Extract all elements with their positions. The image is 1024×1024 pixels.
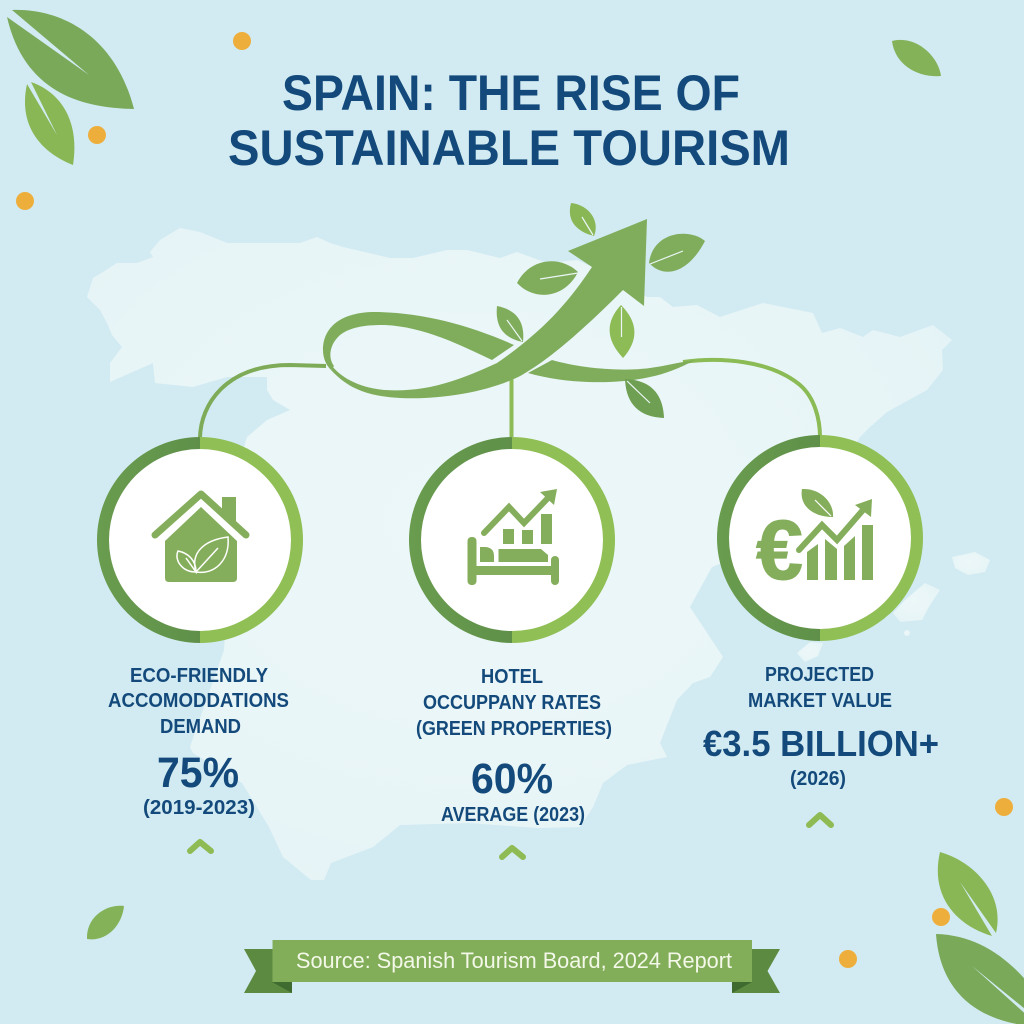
- leaf on arrow 5: [610, 305, 634, 358]
- growth arrow ribbon: [323, 219, 695, 398]
- text block: hotel occupancy: OCCUPPANY RATES: [423, 692, 601, 714]
- text block: projected market value: [703, 664, 939, 790]
- chevrons: [190, 815, 831, 857]
- decorative leaf: bottom-right lower: [936, 934, 1024, 1024]
- panel: market value icon: [717, 435, 923, 641]
- decorative leaf: top-left small: [25, 82, 74, 165]
- text block: eco-friendly demand: (2019-2023): [143, 797, 255, 819]
- text block: hotel occupancy: AVERAGE (2023): [441, 804, 585, 826]
- panel: hotel occupancy icon: [409, 437, 615, 643]
- title: [228, 65, 790, 176]
- title: SUSTAINABLE TOURISM: [228, 120, 790, 176]
- decorative leaf: bottom-right upper: [938, 852, 998, 936]
- source banner: Source: Spanish Tourism Board, 2024 Report: [296, 948, 732, 973]
- leaf on arrow 1: [570, 203, 596, 236]
- icon: bed and rising chart: [468, 489, 559, 585]
- text block: hotel occupancy: HOTEL: [481, 666, 543, 688]
- map of Spain: [87, 228, 990, 880]
- leaf on arrow 6: [625, 379, 664, 418]
- icon: euro and chart with leaf: [756, 489, 873, 597]
- text block: eco-friendly demand: [108, 665, 289, 819]
- connector: left: [200, 365, 326, 437]
- text block: eco-friendly demand: ACCOMODDATIONS: [108, 690, 289, 712]
- text block: eco-friendly demand: ECO-FRIENDLY: [130, 665, 269, 687]
- text block: hotel occupancy: (GREEN PROPERTIES): [416, 718, 612, 740]
- connector: right: [683, 360, 820, 437]
- decorative leaf: top-right: [892, 40, 941, 76]
- leaf on arrow 3: [517, 261, 578, 295]
- text block: hotel occupancy: [416, 666, 612, 826]
- title: SPAIN: THE RISE OF: [282, 65, 740, 121]
- leaf on arrow 4: [497, 306, 523, 342]
- text block: eco-friendly demand: 75%: [157, 749, 239, 797]
- decorative leaf: bottom-left: [87, 906, 124, 939]
- decorative leaf: top-left large: [7, 10, 134, 109]
- source banner: [244, 940, 780, 993]
- text block: hotel occupancy: 60%: [471, 755, 553, 803]
- text block: eco-friendly demand: DEMAND: [160, 716, 241, 738]
- panel: eco-friendly accommodations icon: [97, 437, 303, 643]
- icon: euro and chart with leaf: €: [756, 503, 803, 597]
- text block: projected market value: (2026): [790, 768, 846, 790]
- icon: house with leaves: [155, 494, 246, 582]
- text block: projected market value: €3.5 BILLION+: [703, 723, 939, 764]
- text block: projected market value: PROJECTED: [765, 664, 874, 686]
- connector: center: [510, 378, 514, 437]
- leaf on arrow 2: [649, 234, 705, 272]
- text block: projected market value: MARKET VALUE: [748, 690, 892, 712]
